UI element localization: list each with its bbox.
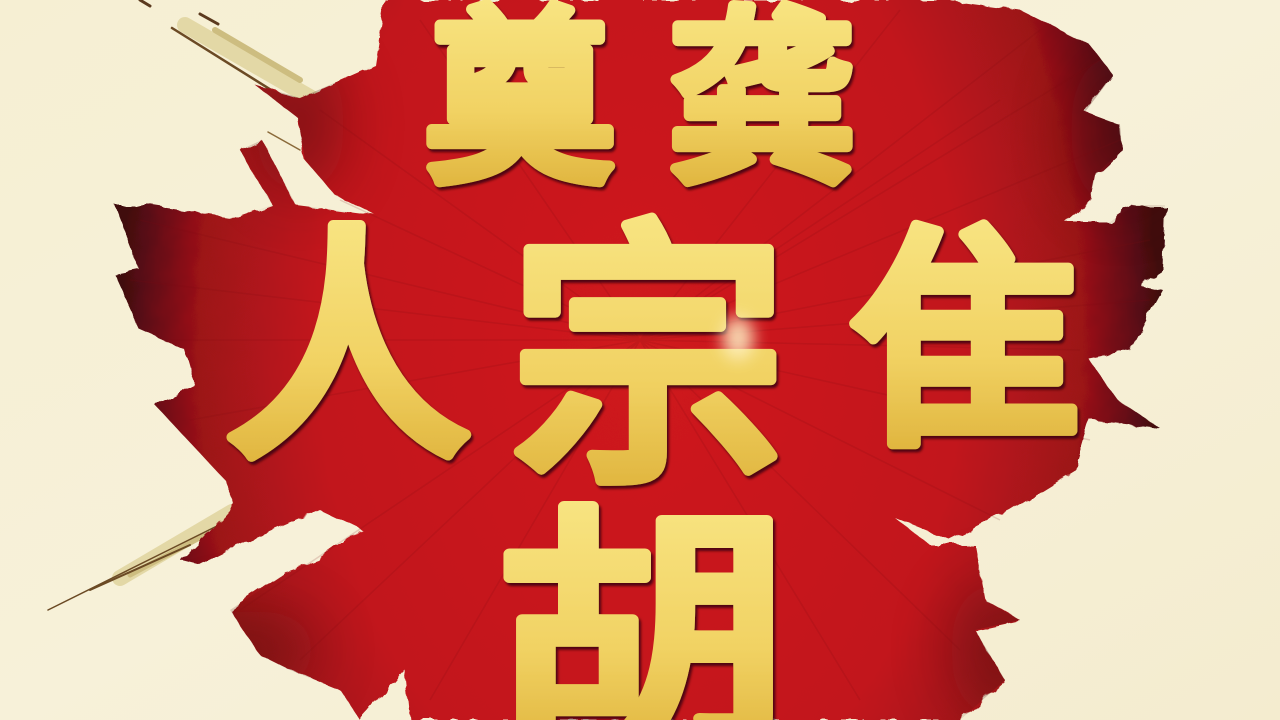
character: centre middle: 宗 (508, 206, 788, 518)
brush texture streaks (130, 10, 1150, 700)
character: right middle: 隹 (848, 211, 1084, 474)
glow highlight (722, 316, 754, 360)
character row 2 (223, 206, 1084, 518)
brush splatter: bottom left (48, 512, 232, 610)
blot edge shading (180, 50, 1170, 720)
character: right top: 龚 (667, 0, 857, 207)
character: left top: 奠 (425, 0, 615, 207)
character row 1 (425, 0, 857, 207)
character: left middle: 人 (223, 210, 473, 489)
brush splatter: top left (140, 0, 315, 150)
